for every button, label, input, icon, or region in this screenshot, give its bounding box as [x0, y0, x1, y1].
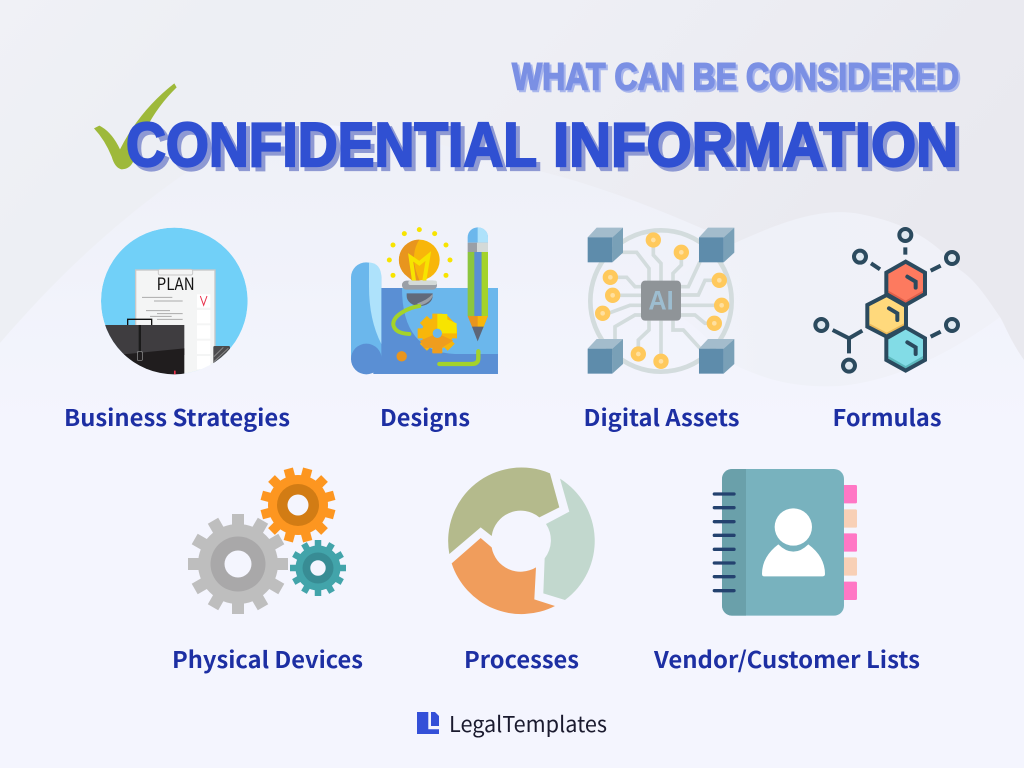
icon: plan and briefcase: PLAN — [157, 271, 195, 295]
main heading: confidential information: INFORMATION — [553, 111, 958, 180]
icon: blueprint, bulb and pencil — [351, 227, 498, 374]
icon: three gears — [188, 469, 346, 614]
item: physical devices — [172, 469, 363, 675]
title block — [94, 56, 959, 180]
item: designs — [351, 227, 498, 433]
icon part: yellow gear — [418, 314, 457, 353]
icon: address book — [714, 469, 857, 616]
item: vendor/customer lists — [653, 469, 920, 675]
label: Formulas — [832, 399, 942, 433]
label: Business Strategies — [64, 399, 290, 433]
label: Processes — [464, 641, 579, 675]
label: Digital Assets — [584, 399, 740, 433]
icon: green check mark — [94, 83, 177, 169]
main heading: confidential information: CONFIDENTIAL — [126, 111, 537, 180]
icon: plan and briefcase — [100, 228, 248, 380]
icon: molecule hexagons — [815, 229, 958, 372]
gear: teal — [290, 540, 346, 596]
icon: cycle arrows — [448, 468, 595, 614]
item: formulas — [815, 229, 958, 433]
main heading: confidential information — [126, 111, 958, 180]
brand name: LegalTemplates — [449, 707, 607, 739]
gear: orange — [262, 469, 334, 541]
item: processes — [448, 468, 595, 675]
label: Physical Devices — [172, 641, 363, 675]
icon: AI chip circuit: AI — [648, 285, 674, 315]
label: Designs — [380, 399, 470, 433]
gear: gray — [188, 514, 288, 614]
icon part: pencil — [468, 227, 488, 341]
footer logo: LegalTemplates — [417, 707, 607, 739]
icon: AI chip circuit — [588, 228, 734, 374]
icon: logo mark — [417, 712, 439, 734]
item: digital assets — [584, 228, 740, 433]
icon part: cubes — [588, 228, 734, 374]
label: Vendor/Customer Lists — [653, 641, 920, 675]
item: business strategies — [64, 228, 290, 433]
